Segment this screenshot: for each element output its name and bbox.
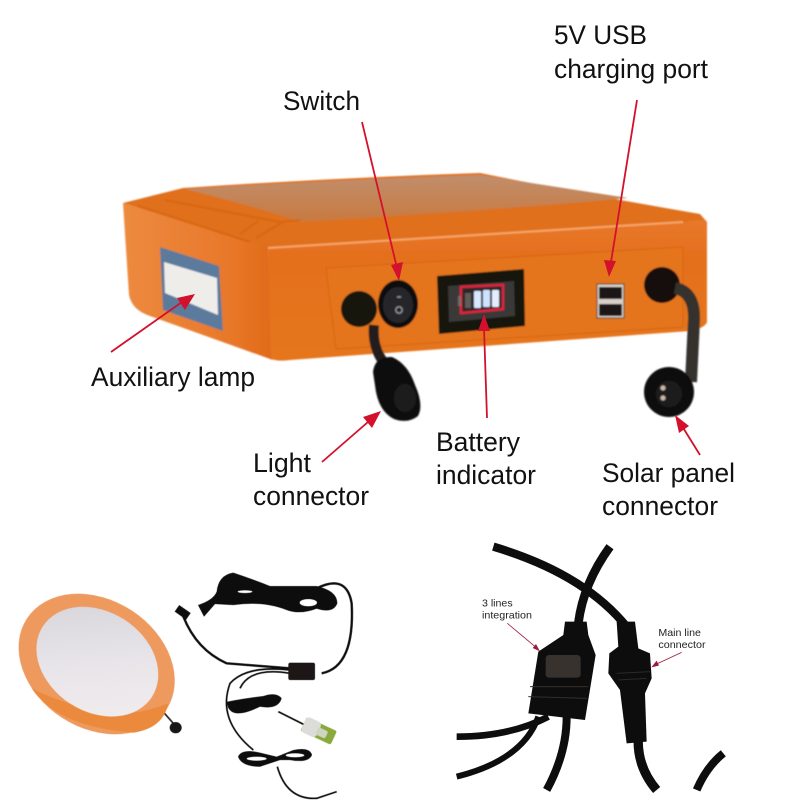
label: solar panel connector: connector [602, 491, 718, 521]
orange battery box [123, 173, 707, 421]
label: 3 lines integration [482, 598, 532, 621]
arrow: solar connector [675, 415, 700, 455]
box front face [268, 220, 707, 361]
label: 3 lines integration: integration [482, 610, 532, 621]
cables [457, 547, 723, 790]
arrow: auxiliary lamp [111, 294, 195, 352]
label: USB port: 5V USB [554, 20, 647, 50]
rocker switch [378, 280, 418, 328]
label: main line connector: Main line [658, 628, 701, 639]
arrow: main line [651, 652, 682, 667]
upper cable coil [175, 573, 352, 798]
arrow: switch [362, 122, 403, 281]
label: battery indicator [436, 427, 536, 490]
label: battery indicator: Battery [436, 427, 520, 457]
solar panel connector plug [644, 267, 694, 417]
label: USB port [554, 20, 708, 84]
recessed front panel [326, 247, 683, 349]
arrow: light connector [322, 411, 381, 462]
three-line junction [528, 622, 596, 720]
label: solar panel connector [602, 458, 735, 521]
ceiling lamp [0, 565, 201, 763]
dual USB ports [597, 284, 624, 318]
light connector plug [341, 291, 420, 421]
lamp with cable set [0, 565, 352, 798]
main line connector [608, 622, 652, 743]
label: light connector [253, 448, 369, 511]
box top surface [123, 173, 707, 248]
side grooves [138, 200, 300, 242]
label: USB port: charging port [554, 54, 708, 84]
bottom figure-eight coil [238, 749, 312, 767]
label: auxiliary lamp: Auxiliary lamp [91, 362, 255, 392]
label: solar panel connector: Solar panel [602, 458, 735, 488]
auxiliary lamp window [160, 247, 223, 331]
arrow: 3 lines [507, 623, 540, 651]
green remote [300, 716, 337, 745]
battery indicator [437, 269, 525, 334]
box left face [123, 203, 273, 360]
front highlight [268, 222, 683, 248]
arrow: USB port [604, 100, 637, 277]
lower left coil [227, 694, 282, 713]
label: main line connector: connector [658, 640, 706, 651]
label: light connector: connector [253, 481, 369, 511]
label: light connector: Light [253, 448, 311, 478]
cable connector photo [457, 547, 723, 790]
arrow: battery indicator [478, 314, 490, 418]
label: switch: Switch [283, 86, 360, 116]
label: main line connector [658, 628, 706, 651]
top panel [185, 175, 628, 222]
label: battery indicator: indicator [436, 460, 536, 490]
label: 3 lines integration: 3 lines [482, 598, 513, 609]
